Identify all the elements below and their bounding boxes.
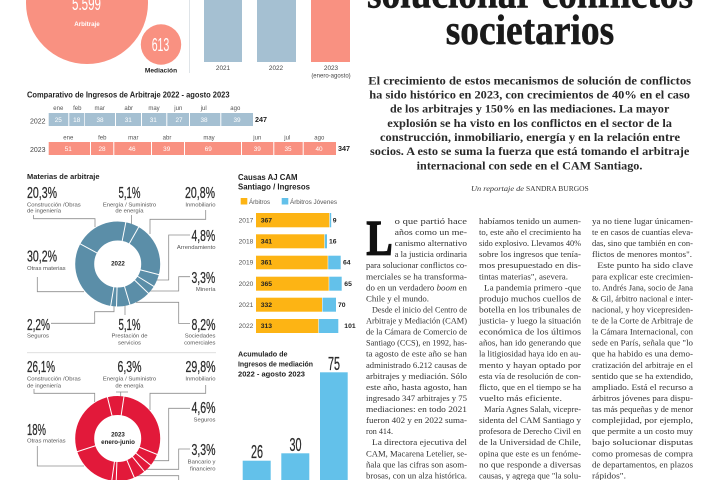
stacked bar chart: causas: 367 — [261, 218, 272, 224]
bar chart: annual totals — [204, 0, 351, 80]
donut chart: 2022 — [79, 221, 160, 308]
labels: 2022 — [27, 185, 216, 346]
segmented bar: 2022: feb — [73, 106, 82, 112]
article column 1: La directora ejecutiva del — [372, 438, 468, 447]
headline — [367, 0, 693, 54]
article column 2: justicia- y luego la situación — [478, 316, 582, 326]
article column 3: te de la Corte de Arbitraje de — [592, 316, 693, 326]
labels: 2022: comerciales — [184, 340, 216, 346]
article column 2: la litigiosidad haya ido en au- — [479, 350, 581, 359]
segmented bar: 2022: may — [148, 106, 160, 112]
stacked bar chart: causas: 2021 — [239, 302, 254, 309]
article column 3: ampliado. Está el recurso a — [592, 383, 693, 392]
stacked bar chart: causas: 2019 — [239, 260, 254, 266]
labels: 2023: Construcción /Obras — [27, 377, 81, 383]
article column 3: la Cámara Internacional, con — [592, 328, 694, 337]
article column 3: & Gil, árbitro nacional e inter- — [592, 294, 693, 303]
article column 1: para solucionar conflictos co- — [366, 261, 467, 270]
article column 2: económica de los últimos — [479, 328, 581, 337]
bubble: arbitraje — [26, 0, 148, 64]
labels: 2022: Minería — [196, 287, 216, 293]
intro paragraph: ha sido histórico en 2023, con crecimientos de 40% en el caso — [369, 88, 690, 102]
labels: 2022: Sociedades — [185, 334, 216, 340]
segmented bar: 2023: 2023 — [30, 147, 46, 154]
labels: 2023: 3,3% — [192, 442, 216, 459]
labels: 2022: 8,2% — [192, 317, 216, 334]
labels: 2022: 4,8% — [192, 228, 215, 245]
labels: 2022: Inmobiliario — [185, 202, 216, 208]
article column 2: habíamos tenido un aumen- — [479, 217, 581, 226]
article column 3: para explicar este crecimien- — [592, 272, 693, 281]
article column 3: bajo solucionar disputas — [592, 438, 693, 447]
article column 2: años, han ido generando que — [479, 339, 581, 348]
article column 1: Desde el inicio del Centro de — [372, 306, 467, 314]
article column 3: tas más pequeñas y de menor — [592, 405, 693, 414]
article column 3: sentido que se ha extendido, — [592, 372, 693, 381]
bar chart: annual totals: 2023 — [324, 65, 339, 72]
heading: acumulado de ingresos de mediación — [238, 350, 313, 378]
article column 3: que permite a un costo muy — [592, 427, 694, 436]
article column 3: flictos de menores montos". — [592, 250, 692, 259]
labels: 2022: Prestación de — [111, 334, 148, 340]
labels: 2023: 26,1% — [27, 359, 55, 376]
segmented bar: 2022: 39 — [233, 117, 241, 124]
labels: 2022: 3,3% — [192, 270, 215, 287]
labels: 2022: Energía / Suministro — [103, 202, 157, 208]
segmented bar: 2023 — [30, 136, 350, 155]
bubble: mediación — [141, 24, 181, 75]
intro paragraph: construcción, inmobiliario, energía y en la relación entre — [380, 130, 681, 144]
article column 2: sobre los ingresos que tenía- — [479, 250, 581, 259]
segmented bar: 2023: 39 — [254, 146, 261, 153]
stacked bar chart: causas: 2020 — [239, 281, 254, 288]
segmented bar: 2022: jul — [200, 106, 207, 112]
segmented bar: 2023: ago — [314, 136, 325, 142]
segmented bar: 2023: abr — [163, 136, 171, 142]
heading: acumulado de ingresos de mediación: Ingresos de mediación — [238, 360, 313, 369]
legend: árbitros: Árbitros Jóvenes — [290, 199, 337, 206]
legend: árbitros — [241, 198, 337, 206]
stacked bar chart: causas: 341 — [261, 238, 272, 246]
article column 2: de la Universidad de Chile, — [479, 438, 581, 447]
intro paragraph: de los arbitrajes y 150% en las mediaciones. La mayor — [390, 102, 670, 116]
drop cap: L — [366, 210, 392, 266]
article column 2: no que responde a diversas — [479, 460, 581, 469]
article column 1: ingresado 347 arbitrajes y 75 — [366, 394, 467, 403]
article column 2: vuelto más eficiente. — [479, 394, 562, 403]
labels: 2023: 4,6% — [192, 400, 216, 417]
labels: 2023: Otras materias — [27, 439, 66, 445]
labels: 2022: 30,2% — [27, 249, 57, 266]
labels: 2022: 5,1% — [118, 185, 140, 202]
labels: 2022: de energía — [115, 208, 144, 214]
article column 1: Arbitraje y Mediación (CAM) — [366, 316, 467, 326]
bar chart: mediación: 26 — [251, 441, 263, 462]
article column 3: sede en París, señala que "lo — [592, 339, 693, 348]
article column 3: das, sino que también en con- — [592, 239, 693, 248]
leader lines: 2023 — [34, 385, 206, 480]
article column 1: fueron 402 y en 2022 suma- — [366, 416, 467, 425]
article column 3: árbitros jóvenes para dispu- — [592, 394, 693, 403]
article column 2: tintas materias", asevera. — [479, 272, 568, 281]
segmented bar: 2022: 27 — [175, 117, 183, 124]
article column 1 — [366, 217, 468, 480]
article column 3: te en casos de cuantías eleva- — [592, 228, 693, 237]
segmented bar: 2022: 2022 — [30, 118, 46, 125]
segmented bar: 2022 — [30, 106, 267, 126]
segmented bar: 2022: abr — [124, 106, 133, 112]
bubble chart: arbitraje and mediación — [26, 0, 181, 75]
heading: materias de arbitraje: Materias de arbitraje — [27, 172, 100, 181]
stacked bar chart: causas: 313 — [261, 323, 272, 330]
segmented bar: 2022: 247 — [255, 115, 267, 124]
article column 1: o que partió hace — [395, 217, 467, 226]
segmented bar: 2023: 35 — [284, 146, 292, 153]
article column 1: ñala que las cifras son asom- — [366, 460, 467, 469]
byline — [471, 185, 589, 193]
article column 3: de departamentos, en plazos — [592, 460, 693, 469]
segmented bar: 2022: mar — [95, 106, 105, 112]
segmented bar: 2023: 69 — [205, 146, 212, 153]
article column 3: to. Andrés Jana, socio de Jana — [592, 283, 693, 292]
labels: 2022: de ingeniería — [27, 208, 62, 214]
bar chart: mediación: 30 — [290, 434, 302, 455]
stacked bar chart: causas: 365 — [261, 281, 272, 288]
stacked bar chart: causas: 332 — [261, 302, 272, 309]
bar chart: annual totals: 2021 — [216, 65, 231, 72]
bar chart: mediación: 75 — [328, 353, 340, 374]
segmented bar: 2023: 39 — [163, 146, 171, 153]
stacked bar chart: causas: 361 — [261, 260, 272, 266]
stacked bar chart: causas: 16 — [329, 238, 337, 246]
stacked bar chart: causas: 2017 — [239, 218, 254, 224]
heading: acumulado de ingresos de mediación: Acumulado de — [238, 350, 288, 359]
article column 1: este año, hasta agosto, han — [366, 383, 468, 392]
article column 2: mento y hayan optado por — [479, 361, 581, 370]
byline: Un reportaje de — [471, 185, 524, 193]
stacked bar chart: causas: 9 — [333, 218, 337, 224]
labels: 2022: 20,8% — [185, 185, 215, 202]
stacked bar chart: causas: 65 — [344, 281, 352, 288]
leader lines: 2022 — [34, 210, 206, 324]
segmented bar: 2023: mar — [128, 136, 138, 142]
segmented bar: 2023: may — [203, 136, 215, 142]
article column 2: María Agnes Salah, vicepre- — [484, 405, 581, 414]
article column 2: botella en los tribunales de — [479, 306, 581, 314]
article column 3: como promesas de compra — [592, 449, 693, 458]
segmented bar: 2022: 25 — [55, 117, 62, 124]
headline: societarios — [446, 8, 614, 54]
heading: comparativo de ingresos: Comparativo de Ingresos de Arbitraje 2022 - agosto 2023 — [27, 90, 230, 100]
segmented bar: 2023: feb — [98, 136, 107, 142]
segmented bar: 2023: 40 — [315, 146, 323, 153]
heading: causas AJ CAM — [238, 173, 311, 192]
labels: 2022: Construcción /Obras — [27, 202, 81, 208]
article column 3 — [592, 217, 694, 480]
labels: 2023: de ingeniería — [27, 383, 62, 389]
article column 1: administrado 6.212 causas de — [366, 361, 467, 370]
article column 1: arbitrajes y mediación. Sólo — [366, 372, 467, 381]
labels: 2022: Otras materias — [27, 266, 66, 272]
article column 2: La pandemia primero -que — [484, 283, 581, 292]
legend: árbitros: Árbitros — [249, 199, 270, 206]
labels: 2023: de energía — [115, 383, 144, 389]
article column 3: complejidad, por ejemplo, — [592, 416, 693, 425]
segmented bar: 2022: 18 — [73, 117, 81, 124]
intro paragraph: internacional con sede en el CAM Santiago. — [417, 158, 642, 172]
bar chart: mediación — [243, 353, 348, 480]
article column 1: a la justicia ordinaria — [395, 250, 467, 259]
article column 3: cratización del arbitraje en el — [592, 361, 694, 370]
article column 1: do en un verdadero boom en — [366, 283, 468, 292]
article column 2: to, este año el crecimiento ha — [479, 228, 581, 237]
bubble: mediación: 613 — [152, 35, 169, 55]
segmented bar: 2023: 28 — [98, 146, 106, 153]
labels: 2022: Seguros — [27, 334, 49, 340]
labels: 2022: 5,1% — [118, 317, 140, 334]
segmented bar: 2023: 51 — [65, 146, 72, 153]
labels: 2022: servicios — [118, 340, 141, 346]
segmented bar: 2023: 46 — [128, 146, 136, 153]
article column 1: Chile y el mundo. — [366, 294, 429, 303]
bubble: mediación: Mediación — [145, 68, 177, 75]
article column 1: de la Cámara de Comercio de — [366, 328, 467, 337]
article column 3: que ha habido es una demo- — [592, 350, 693, 359]
byline: SANDRA BURGOS — [526, 185, 589, 193]
stacked bar chart: causas: 70 — [338, 302, 346, 309]
bubble: arbitraje: Arbitraje — [74, 21, 100, 28]
segmented bar: 2023: jul — [283, 136, 290, 142]
labels: 2023: Inmobiliario — [185, 377, 216, 383]
article column 1: ta agosto de este año se han — [366, 350, 468, 359]
article column 2 — [478, 217, 582, 480]
article column 1: canismo alternativo — [395, 239, 467, 248]
intro paragraph: socios. A esto se suma la fuerza que está tomando el arbitraje — [370, 144, 690, 158]
article column 3: Este punto ha sido clave — [597, 261, 693, 270]
stacked bar chart: causas: 64 — [343, 260, 351, 266]
segmented bar: 2022: 31 — [150, 117, 157, 124]
bar chart: annual totals: 2022 — [269, 65, 284, 72]
labels: 2023: Bancario y — [188, 460, 216, 466]
heading: acumulado de ingresos de mediación: 2022 - agosto 2023 — [238, 369, 305, 378]
labels: 2023: 29,8% — [186, 359, 216, 376]
labels: 2023: Seguros — [194, 418, 216, 424]
segmented bar: 2022: ago — [230, 106, 241, 112]
article column 3: ya no tiene lugar únicamen- — [592, 217, 693, 226]
article column 1: CAM, Macarena Letelier, se- — [366, 449, 467, 458]
article column 2: produjo muchos cuellos de — [479, 294, 581, 303]
article column 3: nacional, y hoy vicepresiden- — [592, 306, 693, 314]
labels: 2023 — [27, 359, 216, 472]
article column 2: opina que este es un fenóme- — [479, 449, 581, 458]
article column 1: mediaciones: en todo 2021 — [366, 405, 467, 414]
article column 2: sido explosivo. Llevamos 40% — [479, 239, 581, 248]
intro paragraph: El crecimiento de estos mecanismos de solución de conflictos — [368, 73, 691, 87]
intro paragraph: explosión se ha visto en los conflictos en el sector de la — [387, 116, 672, 130]
article column 1: Santiago (CCS), en 1992, has- — [366, 339, 467, 348]
labels: 2022: Arrendamiento — [177, 245, 216, 251]
bar chart: annual totals: (enero-agosto) — [311, 74, 351, 80]
labels: 2023: Energía / Suministro — [103, 377, 157, 383]
article column 2: sidenta del CAM Santiago y — [479, 416, 582, 425]
donut chart: 2023 — [76, 395, 158, 480]
labels: 2023: financiero — [190, 466, 216, 472]
stacked bar chart: causas: 2022 — [239, 323, 254, 330]
segmented bar: 2022: 38 — [200, 117, 208, 124]
labels: 2023: 18% — [27, 422, 46, 439]
article column 2: esta vía de resolución de con- — [479, 372, 581, 381]
article column 1: merciales se ha transforma- — [366, 272, 467, 281]
donut chart: 2023: enero-junio — [101, 439, 135, 446]
heading: causas AJ CAM: Causas AJ CAM — [238, 173, 298, 182]
labels: 2022: 2,2% — [27, 317, 50, 334]
segmented bar: 2022: jun — [173, 106, 182, 112]
stacked bar chart: causas: 101 — [344, 323, 356, 330]
stacked bar chart: causas: 2018 — [239, 238, 254, 246]
stacked bar chart: causas — [239, 213, 356, 333]
segmented bar: 2023: ene — [63, 136, 74, 142]
labels: 2023: 6,3% — [118, 359, 142, 376]
article column 2: flicto, que en el tiempo se ha — [479, 383, 581, 392]
donut chart: 2023: 2023 — [111, 432, 125, 438]
article column 2: profesora de Derecho Civil en — [479, 427, 582, 436]
segmented bar: 2022: 38 — [96, 117, 104, 124]
segmented bar: 2023: jun — [252, 136, 261, 142]
article column 1: años como un me- — [395, 228, 467, 237]
segmented bar: 2023: 347 — [338, 144, 350, 153]
article column 2: mos presupuestado en dis- — [479, 261, 581, 270]
intro paragraph — [368, 73, 691, 172]
labels: 2022: 20,3% — [27, 185, 57, 202]
article column 1: ron 414. — [366, 427, 393, 436]
donut chart: 2022: 2022 — [111, 260, 125, 268]
segmented bar: 2022: ene — [53, 106, 64, 112]
segmented bar: 2022: 31 — [125, 117, 132, 124]
heading: causas AJ CAM: Santiago / Ingresos — [238, 182, 311, 192]
